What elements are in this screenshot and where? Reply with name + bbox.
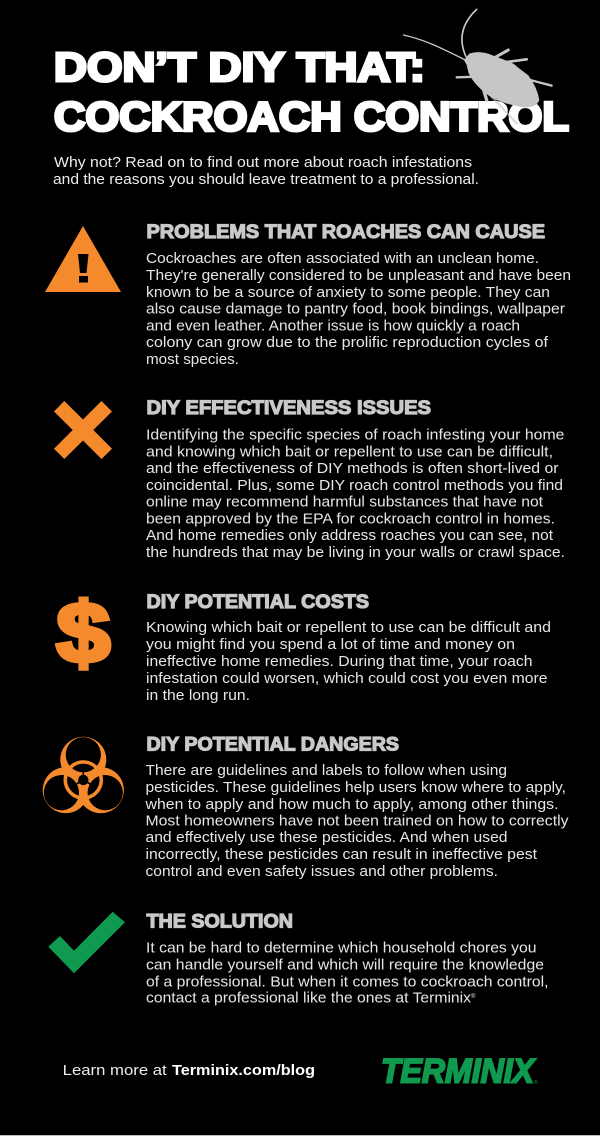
body text: and knowing which bait or repellent to use can be difficult, (146, 444, 553, 460)
Terminix logo: TERMINIX (381, 1052, 536, 1090)
heading: DIY EFFECTIVENESS ISSUES (146, 398, 431, 419)
body text: contact a professional like the ones at Terminix (146, 990, 471, 1006)
panel: DIY effectiveness issues (54, 398, 565, 561)
body text: most species. (146, 352, 239, 368)
body text (146, 251, 571, 368)
heading: DIY POTENTIAL DANGERS (146, 734, 399, 756)
body text: Knowing which bait or repellent to use can be difficult and (146, 620, 551, 636)
panel: problems that roaches can cause (45, 222, 571, 368)
body text: Identifying the specific species of roach infesting your home (146, 428, 565, 444)
icon: warning triangle (45, 226, 121, 292)
heading: PROBLEMS THAT ROACHES CAN CAUSE (146, 222, 545, 243)
body text: and the effectiveness of DIY methods is often short-lived or (146, 461, 559, 477)
panel: the solution (48, 912, 549, 1006)
body text: coincidental. Plus, some DIY roach control methods you find (146, 478, 563, 494)
body text: known to be a source of anxiety to some people. They can (146, 285, 550, 301)
footer call to action: Terminix.com/blog (172, 1062, 315, 1079)
body text: also cause damage to pantry food, book bindings, wallpaper (146, 302, 565, 318)
body text: in the long run. (146, 688, 250, 704)
body text: incorrectly, these pesticides can result in ineffective pest (146, 847, 537, 863)
panel: DIY potential dangers (34, 734, 569, 880)
Terminix logo: ® (534, 1079, 538, 1086)
body text: been approved by the EPA for cockroach control in homes. (146, 512, 555, 528)
title: COCKROACH CONTROL (54, 94, 569, 140)
body text: of a professional. But when it comes to cockroach control, (146, 974, 548, 990)
intro text: and the reasons you should leave treatment to a professional. (53, 172, 479, 188)
icon: orange X (54, 401, 112, 459)
footer call to action: Learn more at (63, 1062, 168, 1079)
title (54, 44, 569, 140)
intro text: Why not? Read on to find out more about roach infestations (54, 155, 472, 171)
panel: DIY potential costs (56, 586, 551, 704)
body text: Cockroaches are often associated with an unclean home. (146, 251, 539, 267)
body text: you might find you spend a lot of time and money on (146, 637, 515, 653)
body text (144, 763, 569, 880)
heading: THE SOLUTION (146, 912, 293, 932)
body text: when to apply and how much to apply, among other things. (144, 797, 558, 813)
body text: They're generally considered to be unpleasant and have been (146, 268, 571, 284)
body text: online may recommend harmful substances that have not (146, 494, 543, 510)
body text: and even leather. Another issue is how quickly a roach (146, 318, 520, 334)
icon: green check mark (48, 912, 125, 973)
heading: DIY POTENTIAL COSTS (146, 592, 369, 613)
body text: ® (471, 993, 476, 1000)
body text (146, 940, 548, 1006)
body text: infestation could worsen, which could cost you even more (146, 671, 548, 687)
icon: biohazard (34, 737, 132, 822)
body text: control and even safety issues and other problems. (146, 864, 498, 880)
body text: ineffective home remedies. During that time, your roach (146, 654, 533, 670)
icon: cockroach (403, 9, 552, 123)
icon: dollar sign: $ (56, 586, 110, 681)
body text: Most homeowners have not been trained on how to correctly (146, 814, 569, 830)
body text: There are guidelines and labels to follow when using (146, 763, 507, 779)
body text: can handle yourself and which will require the knowledge (146, 958, 544, 974)
body text: pesticides. These guidelines help users know where to apply, (146, 780, 566, 796)
body text: the hundreds that may be living in your walls or crawl space. (146, 545, 565, 561)
body text: and effectively use these pesticides. And when used (146, 830, 508, 846)
body text: And home remedies only address roaches you can see, not (146, 528, 553, 544)
title: DON’T DIY THAT: (54, 44, 425, 90)
footer call to action (63, 1062, 315, 1079)
body text (146, 620, 551, 704)
body text: colony can grow due to the prolific reproduction cycles of (146, 335, 548, 351)
body text (146, 428, 565, 561)
body text: It can be hard to determine which household chores you (146, 940, 536, 956)
intro text (53, 155, 479, 188)
